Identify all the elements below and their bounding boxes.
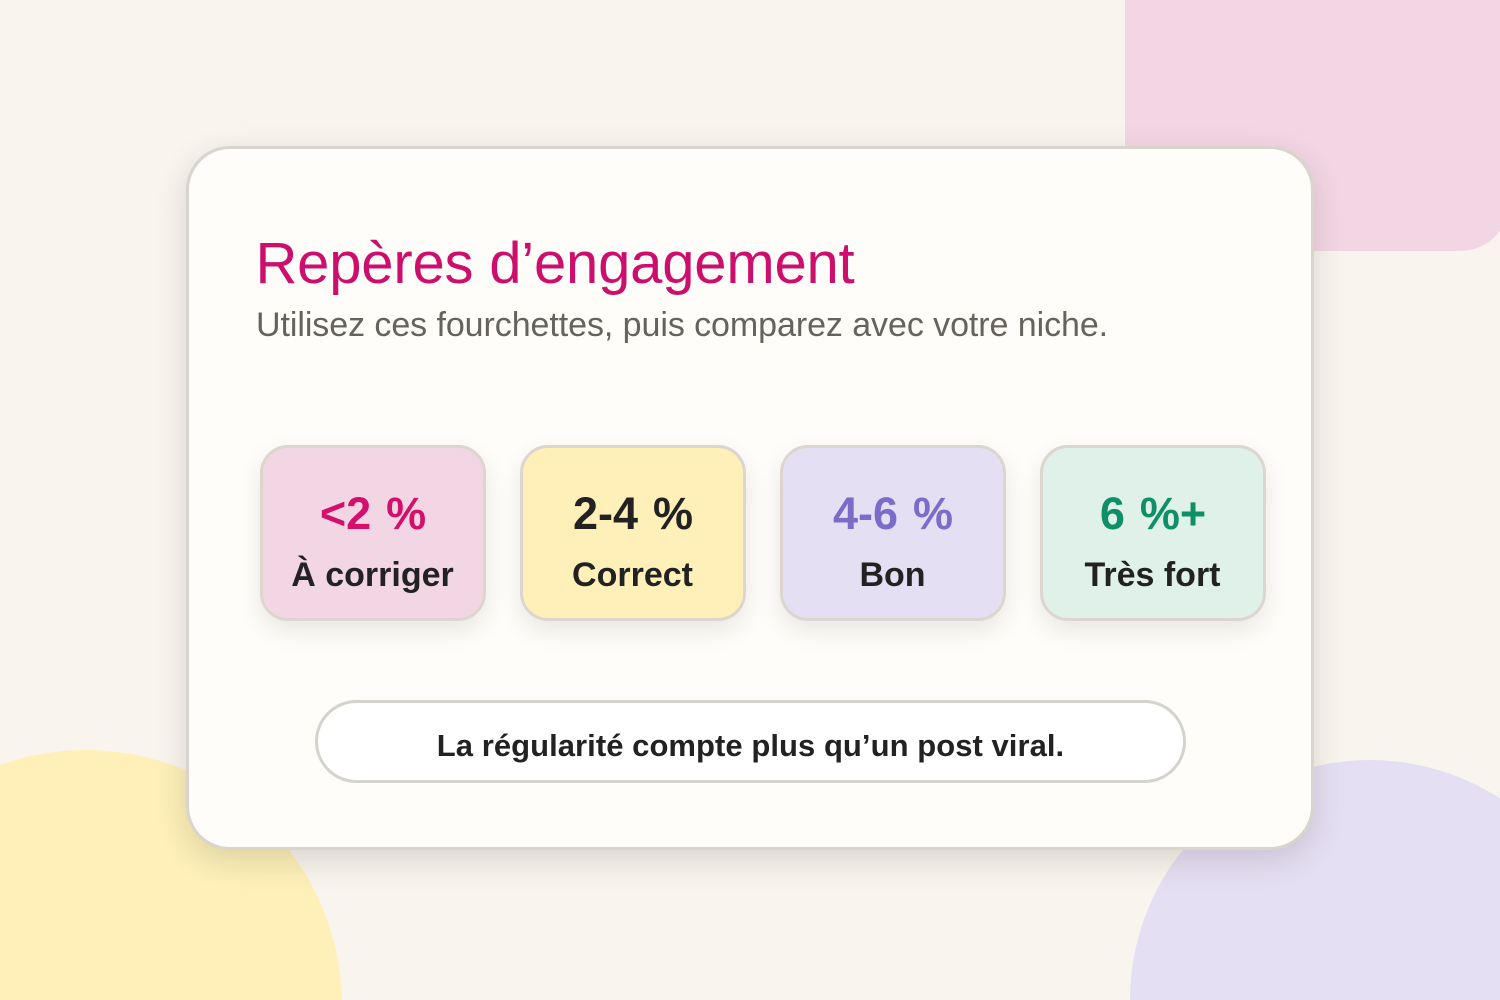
main card bbox=[186, 146, 1314, 850]
label: good: Bon bbox=[859, 556, 926, 594]
tile: 2 to 4 percent bbox=[520, 445, 746, 621]
callout text: La régularité compte plus qu’un post viral. bbox=[437, 728, 1064, 763]
tile: below 2 percent bbox=[260, 445, 486, 621]
callout pill bbox=[315, 700, 1186, 783]
value: 2 to 4 percent: 2-4 % bbox=[573, 488, 693, 539]
title: Repères d’engagement bbox=[256, 231, 854, 296]
value: 6 percent and above: 6 %+ bbox=[1100, 488, 1206, 539]
background blob: yellow bottom left bbox=[0, 750, 342, 1000]
value: below 2 percent: <2 % bbox=[320, 488, 426, 539]
value: 4 to 6 percent: 4-6 % bbox=[833, 488, 953, 539]
tile: 4 to 6 percent bbox=[780, 445, 1006, 621]
label: very strong: Très fort bbox=[1084, 556, 1221, 594]
label: correct: Correct bbox=[572, 556, 693, 594]
background blob: lavender bottom right bbox=[1130, 760, 1500, 1000]
subtitle: Utilisez ces fourchettes, puis comparez avec votre niche. bbox=[256, 306, 1108, 344]
background blob: pink top right bbox=[1125, 0, 1500, 251]
tile: 6 percent and above bbox=[1040, 445, 1266, 621]
label: to fix: À corriger bbox=[291, 556, 454, 594]
